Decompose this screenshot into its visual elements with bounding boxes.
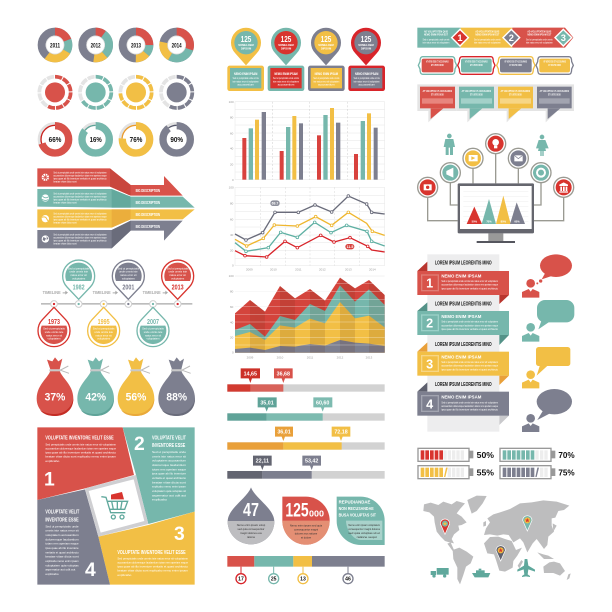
arrow infographic: ipsa quae ab illo inventore veritatis et quasi architecto — [53, 218, 107, 222]
stat callouts and proportion bar: sed quia voluptas sit et — [348, 531, 380, 535]
line chart: 69.7 — [272, 202, 278, 206]
numbered ribbon list: accusantium doloremque laudantium totam rem aperiam eaque — [441, 323, 498, 327]
location pins with boxes: NEMO ENIM IPSAM — [274, 71, 298, 76]
four step panel with cart: beatae vitae dicta sunt — [152, 480, 186, 484]
stacked area chart: 2010 — [277, 356, 284, 360]
stat callouts and proportion bar: ratione — [247, 535, 256, 539]
arrow infographic: accusantium doloremque laudantium totam rem aperiam eaque — [53, 194, 107, 198]
network of icons around monitor: 60% — [514, 220, 520, 224]
stacked area chart: 2013 — [366, 356, 373, 360]
timeline — [38, 260, 194, 347]
four step panel with cart: ipsa quae ab illo inventore veritatis et quasi architecto — [45, 451, 117, 455]
network of icons around monitor: 80% — [501, 220, 506, 224]
arrow infographic: accusantium doloremque laudantium totam rem aperiam eaque — [53, 174, 107, 178]
four step panel with cart: explicabo — [45, 572, 59, 576]
timeline: Sed ut perspiciatis — [93, 327, 115, 331]
stat callouts and proportion bar: dolores eos ratione — [295, 531, 318, 535]
timeline: Sed ut perspiciatis — [142, 327, 165, 331]
percentage donuts: 66% — [49, 135, 62, 144]
arrow infographic: BIG DESCRIPTION — [136, 200, 160, 205]
timeline: 1973 — [48, 317, 60, 326]
range sliders: 22,11 — [256, 459, 269, 465]
four step panel with cart: aspernatur aut odit aut — [152, 493, 186, 497]
four step panel with cart: explicabo nemo enim ipsam — [45, 559, 79, 563]
stat callouts and proportion bar: et dolore — [301, 535, 312, 539]
numbered ribbon list: NEMO ENIM IPSAM — [441, 395, 481, 400]
timeline: Sed ut perspiciatis — [68, 266, 90, 270]
money bags: 88% — [166, 391, 188, 403]
stat callouts and proportion bar: 000 — [309, 509, 324, 519]
location pins with boxes: NEMO ENIM IPSAM — [315, 71, 338, 76]
four step panel with cart: VOLUPTATE INVENTORE VELIT ESSE — [45, 436, 114, 442]
location pins with boxes: 125 — [241, 34, 251, 44]
stat callouts and proportion bar — [227, 487, 385, 584]
timeline: TIMELINE — [43, 290, 61, 295]
stat callouts and proportion bar: Nemo enim ipsam volup — [237, 523, 266, 527]
four step panel with cart: 1 — [44, 469, 55, 490]
stat callouts and proportion bar: 13 — [300, 577, 306, 583]
battery indicators — [418, 448, 575, 479]
bracket boxes: ET IUSTO ODIO — [470, 63, 483, 67]
bracket boxes — [418, 57, 573, 74]
bracket boxes: ET IUSTO ODIO — [431, 63, 444, 67]
arrow infographic: beatae vitae dicta sunt — [53, 200, 77, 204]
bracket boxes: AT VERO EOS ET ACCUSAMUS — [504, 60, 527, 64]
numbered ribbon list: Sed ut perspiciatis unde omnis iste natus error sit voluptatem — [441, 360, 499, 364]
arrow infographic: beatae vitae dicta sunt — [53, 221, 77, 225]
stat callouts and proportion bar: consequuntur magni dolores — [348, 527, 381, 531]
timeline: unde omnis iste — [45, 330, 64, 334]
stacked area chart — [229, 274, 385, 360]
network of icons around monitor: 50% — [472, 220, 477, 224]
four step panel with cart: voluptatem quia voluptas sit — [152, 489, 186, 493]
four step panel with cart: doloremque laudantium — [45, 537, 80, 541]
range sliders: 36,68 — [277, 371, 290, 377]
bar chart — [229, 100, 385, 182]
numbered ribbon list: Sed ut perspiciatis unde omnis iste natus error sit voluptatem — [441, 279, 499, 283]
timeline: 2007 — [147, 317, 159, 326]
stat callouts and proportion bar: 17 — [238, 577, 244, 583]
line chart: 2012 — [319, 268, 326, 272]
speech boxes: AT VOLUPTAS UT ACCUSAMUS — [501, 89, 530, 93]
pie charts by year: 2014 — [172, 42, 182, 49]
percentage donuts: 90% — [170, 135, 183, 144]
four step panel with cart: ipsa quae ab illo inventore — [152, 472, 187, 476]
pie charts by year: 2013 — [131, 42, 141, 49]
location pins with boxes: DIPSUM — [361, 47, 372, 51]
arrow infographic: BIG DESCRIPTION — [136, 212, 160, 217]
segmented ring charts — [39, 77, 192, 108]
diamond step ribbon: Sed ut perspiciatis unde omnis — [526, 37, 553, 41]
arrow infographic — [37, 168, 195, 248]
numbered ribbon list: 2 — [426, 317, 433, 331]
timeline: natus error sit — [145, 333, 161, 337]
four step panel with cart: beatae vitae dicta sunt explicabo nemo enim ipsam — [117, 569, 189, 573]
diamond step ribbon: iste natus error sit voluptatem — [526, 41, 553, 45]
line chart: 2009 — [246, 268, 253, 272]
battery indicators: 70% — [558, 450, 575, 460]
four step panel with cart: accusantium doloremque laudantium totam rem aperiam eaque — [45, 447, 116, 451]
diamond step ribbon: 2 — [509, 33, 514, 43]
four step panel with cart: doloremque laudantium — [152, 463, 187, 467]
diamond step ribbon: 1 — [457, 33, 463, 43]
stacked area chart: 100 — [229, 274, 234, 278]
four step panel with cart: INVENTORE ESSE — [152, 443, 185, 449]
four step panel with cart: totam rem aperiam eaque — [45, 542, 79, 546]
speech boxes: ET IUSTO ODIO — [431, 93, 444, 97]
numbered ribbon list: LOREM IPSUM LEORENTIS MINO — [435, 342, 492, 348]
stacked area chart: 40 — [230, 320, 234, 324]
range sliders: 60,60 — [316, 400, 329, 406]
numbered ribbon list: Sed ut perspiciatis unde omnis iste natus error sit voluptatem — [441, 320, 499, 324]
percentage donuts: 16% — [90, 135, 102, 144]
location pins with boxes: Sed ut perspiciatis unde omnis — [273, 76, 299, 80]
four step panel with cart: veritatis et quasi architecto — [152, 476, 187, 480]
money bags: 42% — [85, 391, 107, 403]
stat callouts and proportion bar: REPUDIANDAE — [339, 500, 371, 506]
four step panel with cart: Sed perspiciatis unde omnis iste natus error sit voluptatem — [117, 557, 189, 561]
battery indicators: 55% — [477, 468, 494, 478]
timeline: unde omnis iste — [69, 270, 88, 274]
four step panel with cart: Sed ut perspiciatis unde — [152, 450, 187, 454]
diamond step ribbon: Sed ut perspiciatis unde omnis — [423, 37, 450, 41]
stacked area chart: 60 — [230, 305, 234, 309]
range sliders: 14,65 — [244, 371, 257, 377]
pie charts by year — [42, 32, 190, 58]
line chart: 100 — [229, 186, 234, 190]
location pins with boxes: accusantium — [278, 83, 295, 87]
diamond step ribbon: 3 — [561, 33, 566, 43]
arrow infographic: Sed ut perspiciatis unde omnis iste natus error sit voluptatem — [53, 191, 107, 195]
four step panel with cart — [37, 427, 195, 585]
stat callouts and proportion bar: 46 — [345, 577, 351, 583]
timeline: TIMELINE — [93, 290, 111, 295]
stat callouts and proportion bar: 47 — [243, 499, 259, 520]
numbered ribbon list: LOREM IPSUM LEORENTIS MINO — [435, 261, 492, 267]
bracket boxes: AT VERO EOS ET ACCUSAMUS — [465, 60, 488, 64]
stat callouts and proportion bar: magni dolores eos — [240, 531, 263, 535]
timeline: 1995 — [98, 317, 110, 326]
timeline: voluptatem — [122, 276, 136, 280]
numbered ribbon list: NEMO ENIM IPSAM — [441, 314, 481, 319]
stat callouts and proportion bar: sed quia consequuntur — [238, 527, 265, 531]
arrow infographic: beatae vitae dicta sunt — [53, 180, 77, 184]
line chart: 2014 — [369, 268, 376, 272]
location pins with boxes: NEMO ENIM IPSAM — [234, 71, 258, 76]
four step panel with cart: beatae vitae dicta sunt explicabo nemo enim ipsam — [45, 455, 117, 459]
numbered ribbon list: NEMO ENIM IPSAM — [441, 354, 481, 359]
speech boxes: AT VOLUPTAS UT ACCUSAMUS — [423, 89, 452, 93]
speech boxes: AT VOLUPTAS UT ACCUSAMUS — [540, 89, 569, 93]
timeline: 2013 — [172, 282, 184, 291]
diamond step ribbon: iste natus error sit voluptatem — [474, 41, 501, 45]
four step panel with cart: accusantium doloremque laudantium totam rem aperiam eaque — [117, 561, 188, 565]
arrow infographic: ipsa quae ab illo inventore veritatis et quasi architecto — [53, 238, 107, 242]
location pins with boxes: DIPSUM — [321, 47, 332, 51]
location pins with boxes: SOMELOEM — [278, 43, 295, 47]
speech boxes: ET IUSTO ODIO — [548, 93, 561, 97]
location pins with boxes: iste natus error sit voluptatem — [313, 79, 340, 83]
timeline: Sed ut perspiciatis — [43, 327, 66, 331]
bar chart: 0 — [232, 178, 234, 182]
bracket boxes: ET IUSTO ODIO — [548, 63, 561, 67]
numbered ribbon list: accusantium doloremque laudantium totam rem aperiam eaque — [441, 404, 498, 408]
four step panel with cart: totam rem aperiam eaque — [152, 467, 187, 471]
four step panel with cart: explicabo — [152, 498, 168, 502]
location pins with boxes: 125 — [361, 34, 371, 44]
line chart: 2010 — [270, 268, 277, 272]
stacked area chart: 0 — [232, 351, 234, 355]
numbered ribbon list: ipsa quae ab illo inventore veritatis et quasi architecto — [441, 327, 498, 331]
four step panel with cart: explicabo nemo enim ipsam — [152, 485, 187, 489]
numbered ribbon list: accusantium doloremque laudantium totam rem aperiam eaque — [441, 283, 498, 287]
four step panel with cart: VOLUPTATE INVENTORE VELIT ESSE — [117, 550, 186, 556]
timeline: TIMELINE — [143, 290, 161, 295]
location pins with boxes: SOMELOEM — [238, 43, 255, 47]
arrow infographic: accusantium doloremque laudantium totam rem aperiam eaque — [53, 215, 107, 219]
location pins with boxes: DIPSUM — [281, 47, 292, 51]
four step panel with cart: omnis iste natus error sit — [152, 454, 186, 458]
stat callouts and proportion bar: Nemo enim ipsam voluptatem — [348, 523, 381, 527]
range sliders: 35,01 — [260, 400, 274, 406]
stat callouts and proportion bar: NON RECUSANDAE — [339, 506, 374, 512]
money bags — [37, 357, 195, 416]
diamond step ribbon — [417, 28, 573, 48]
timeline: natus error sit — [120, 273, 137, 277]
battery indicators: 50% — [477, 450, 494, 460]
four step panel with cart: INVENTORE ESSE — [45, 517, 79, 523]
four step panel with cart: explicabo — [117, 573, 132, 577]
timeline: voluptatem — [146, 337, 160, 341]
four step panel with cart: VOLUPTATE VELIT — [45, 509, 80, 515]
timeline: unde omnis iste — [144, 330, 163, 334]
speech boxes — [417, 84, 574, 122]
bar chart: 40 — [230, 147, 234, 151]
location pins with boxes: 125 — [321, 34, 331, 44]
location pins with boxes: 125 — [281, 34, 291, 44]
four step panel with cart: explicabo — [45, 459, 60, 463]
timeline: natus error sit — [71, 273, 87, 277]
diamond step ribbon: NEMO ENIM IPSAM EST — [424, 33, 448, 37]
timeline: voluptatem — [97, 337, 111, 341]
bracket boxes: ET IUSTO ODIO — [509, 63, 522, 67]
four step panel with cart: VOLUPTATE VELIT — [152, 436, 186, 442]
stat callouts and proportion bar: 125 — [285, 501, 309, 522]
line chart: 60 — [230, 218, 234, 222]
stacked area chart: 80 — [230, 290, 234, 294]
bracket boxes: AT VERO EOS ET ACCUSAMUS — [426, 60, 449, 64]
numbered ribbon list: ipsa quae ab illo inventore veritatis et quasi architecto — [441, 367, 498, 371]
location pins with boxes: Sed ut perspiciatis unde omnis — [233, 76, 259, 80]
range sliders: 72,18 — [334, 430, 348, 436]
line chart: 2013 — [345, 268, 352, 272]
stat callouts and proportion bar: consequuntur magni — [294, 527, 318, 531]
bar chart: 60 — [230, 131, 234, 135]
numbered ribbon list: Sed ut perspiciatis unde omnis iste natus error sit voluptatem — [441, 400, 499, 404]
diamond step ribbon: AD VOLUPTATEM QUIS — [475, 29, 499, 33]
arrow infographic: Sed ut perspiciatis unde omnis iste natus error sit voluptatem — [53, 212, 107, 216]
percentage donuts: 76% — [130, 135, 143, 144]
numbered ribbon list: LOREM IPSUM LEORENTIS MINO — [435, 301, 492, 307]
world map with pins and transport icons — [423, 496, 571, 584]
four step panel with cart: 2 — [134, 434, 145, 455]
four step panel with cart: voluptatem quia voluptas — [45, 563, 79, 567]
arrow infographic: BIG DESCRIPTION — [136, 188, 160, 193]
four step panel with cart: ipsa quae ab illo inventore veritatis et quasi architecto — [117, 565, 189, 569]
stat callouts and proportion bar: 25 — [271, 577, 276, 583]
location pins with boxes — [227, 28, 385, 91]
speech boxes: AT VOLUPTAS UT ACCUSAMUS — [462, 89, 491, 93]
location pins with boxes: accusantium — [358, 83, 376, 87]
four step panel with cart: veritatis et quasi architecto — [45, 550, 79, 554]
location pins with boxes: Sed ut perspiciatis unde omnis — [313, 76, 340, 80]
stat callouts and proportion bar: Nemo enim ipsam sed quia — [290, 523, 323, 527]
bar chart: 100 — [229, 100, 234, 104]
line chart: 0 — [232, 264, 234, 268]
bar chart: 80 — [230, 116, 234, 120]
timeline: voluptatem — [47, 337, 61, 341]
location pins with boxes: iste natus error sit voluptatem — [273, 79, 300, 83]
line chart — [229, 186, 385, 272]
stacked area chart: 20 — [230, 336, 234, 340]
money bags: 56% — [126, 391, 147, 403]
location pins with boxes: SOMELOEM — [318, 43, 335, 47]
timeline: Sed ut perspiciatis — [117, 266, 140, 270]
stacked area chart: 2009 — [247, 356, 254, 360]
four step panel with cart: beatae vitae dicta sunt — [45, 555, 79, 559]
timeline: Sed ut perspiciatis — [167, 266, 189, 270]
four step panel with cart: voluptatem accusantium — [152, 459, 187, 463]
pie charts by year: 2011 — [50, 42, 60, 49]
timeline: 2001 — [122, 282, 134, 291]
timeline: natus error sit — [170, 273, 186, 277]
numbered ribbon list: NEMO ENIM IPSAM — [441, 274, 481, 279]
money bags: 37% — [45, 391, 66, 403]
arrow infographic: accusantium doloremque laudantium totam rem aperiam eaque — [53, 235, 107, 239]
timeline: natus error sit — [46, 333, 62, 337]
diamond step ribbon: NEMO ENIM IPSAM EST — [527, 33, 551, 37]
four step panel with cart: Sed ut perspiciatis unde — [45, 524, 79, 528]
location pins with boxes: iste natus error sit voluptatem — [233, 79, 259, 83]
arrow infographic: ipsa quae ab illo inventore veritatis et quasi architecto — [53, 197, 107, 201]
numbered ribbon list — [417, 254, 509, 432]
four step panel with cart: voluptatem accusantium — [45, 533, 80, 537]
numbered ribbon list: ipsa quae ab illo inventore veritatis et quasi architecto — [441, 408, 498, 412]
timeline: voluptatem — [72, 276, 86, 280]
stat callouts and proportion bar: ratione sequi — [357, 535, 377, 539]
pie charts by year: 2012 — [91, 42, 101, 49]
timeline: unde omnis iste — [94, 330, 113, 334]
four step panel with cart: 3 — [174, 524, 185, 545]
line chart: 20 — [230, 249, 234, 253]
timeline: 1982 — [73, 282, 85, 291]
arrow infographic: Sed ut perspiciatis unde omnis iste natus error sit voluptatem — [53, 171, 107, 175]
diamond step ribbon: iste natus error sit voluptatem — [423, 41, 450, 45]
line chart: 11.5 — [347, 245, 353, 249]
arrow infographic: beatae vitae dicta sunt — [53, 241, 77, 245]
network of icons around monitor: 70% — [486, 220, 492, 224]
arrow infographic: ipsa quae ab illo inventore veritatis et quasi architecto — [53, 177, 107, 181]
arrow infographic: BIG DESCRIPTION — [136, 224, 160, 229]
stat callouts and proportion bar: BUSA VOLUPTAS SIT — [339, 513, 376, 519]
line chart: 40 — [230, 233, 234, 237]
range sliders: 53,42 — [305, 459, 318, 465]
numbered ribbon list: accusantium doloremque laudantium totam rem aperiam eaque — [441, 364, 498, 368]
location pins with boxes: iste natus error sit voluptatem — [354, 79, 380, 83]
numbered ribbon list: ipsa quae ab illo inventore veritatis et quasi architecto — [441, 286, 498, 290]
network of icons around monitor — [418, 134, 574, 243]
timeline: unde omnis iste — [119, 270, 138, 274]
line chart: 2011 — [295, 268, 302, 272]
range sliders — [227, 368, 385, 479]
diamond step ribbon: AD VOLUPTATEM QUIS — [527, 29, 551, 33]
line chart: 80 — [230, 202, 234, 206]
location pins with boxes: SOMELOEM — [358, 43, 375, 47]
location pins with boxes: Sed ut perspiciatis unde omnis — [354, 76, 380, 80]
four step panel with cart: Sed perspiciatis unde omnis iste natus error sit voluptatem — [45, 443, 117, 447]
location pins with boxes: DIPSUM — [241, 47, 252, 51]
percentage donuts — [39, 123, 193, 155]
stacked area chart: 2011 — [307, 356, 314, 360]
numbered ribbon list: 3 — [426, 357, 433, 371]
stacked area chart: 2012 — [337, 356, 344, 360]
numbered ribbon list: LOREM IPSUM LEORENTIS MINO — [435, 382, 492, 388]
range sliders: 36,01 — [277, 430, 291, 436]
diamond step ribbon: AD VOLUPTATEM QUIS — [424, 29, 448, 33]
timeline: natus error sit — [96, 333, 112, 337]
location pins with boxes: accusantium — [318, 83, 336, 87]
speech boxes: ET IUSTO ODIO — [470, 93, 483, 97]
numbered ribbon list: 4 — [426, 397, 433, 411]
four step panel with cart: aspernatur aut odit aut — [45, 568, 76, 572]
battery indicators: 75% — [558, 468, 575, 478]
diamond step ribbon: Sed ut perspiciatis unde omnis — [474, 37, 501, 41]
timeline: voluptatem — [171, 276, 185, 280]
numbered ribbon list: 1 — [426, 277, 433, 291]
speech boxes: ET IUSTO ODIO — [509, 93, 522, 97]
people with speech bubbles — [522, 254, 574, 432]
bracket boxes: AT VERO EOS ET ACCUSAMUS — [543, 60, 566, 64]
timeline: unde omnis iste — [168, 270, 187, 274]
location pins with boxes: NEMO ENIM IPSAM — [355, 71, 379, 76]
four step panel with cart: ipsa quae ab illo inventore — [45, 546, 79, 550]
location pins with boxes: accusantium — [237, 83, 255, 87]
four step panel with cart: 4 — [85, 560, 96, 581]
four step panel with cart: omnis iste natus error sit — [45, 529, 79, 533]
bar chart: 20 — [230, 162, 234, 166]
diamond step ribbon: NEMO ENIM IPSAM EST — [475, 33, 499, 37]
arrow infographic: Sed ut perspiciatis unde omnis iste natus error sit voluptatem — [53, 232, 107, 236]
